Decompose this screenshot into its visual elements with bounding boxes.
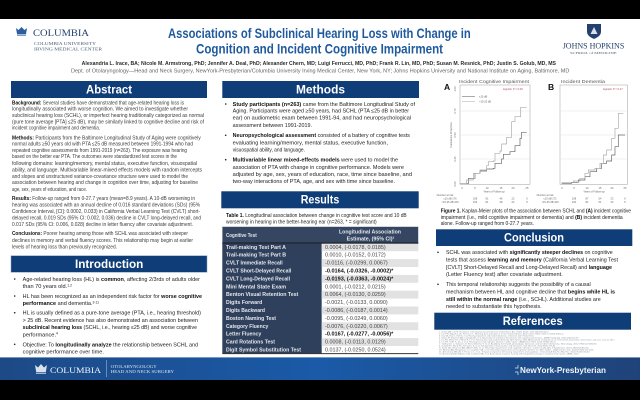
logo: NewYork-Presbyterian: NewYork-Presbyterian — [520, 366, 606, 375]
table: longitudinal association estimates: -0.0076, (-0.0220, 0.0067) — [325, 324, 388, 330]
reference list: 9. Deal JA, Sharrett AR, Albert MS, et al. Hearing impairment and cognitive decline: a pilot study. Am J Epidemiol. 2015;181(9):680-90. — [439, 347, 590, 350]
text: background: Background: Several studies have demonstrated that age-related hearing loss is — [12, 100, 184, 106]
table: longitudinal association estimates: Digit Symbol Substitution Test — [226, 348, 301, 354]
bullet: study participants — [225, 102, 416, 129]
chart A: incident cognitive impairment: 48 — [500, 200, 503, 204]
bullet: causal mechanism: This temporal relationship suggests the possibility of a causal — [446, 282, 591, 288]
chart A: incident cognitive impairment: >15-25 dB 100 — [441, 200, 459, 204]
bullet: definition — [14, 311, 201, 338]
logo: Columbia Otolaryngology Head and Neck Surgery: COLUMBIA — [50, 365, 102, 375]
chart B: incident dementia: logrank: P = 0.17 — [603, 87, 623, 91]
header banner — [16, 24, 625, 74]
bullet: steeper declines: [CVLT] Short-Delayed Recall and Long-Delayed Recall) and language — [446, 265, 612, 271]
panel: abstract — [11, 81, 207, 250]
chart B: incident dementia: >15-25 dB 100 — [541, 200, 559, 204]
text: methods summary: ability, and language. Multivariable linear-mixed effects models with random intercepts — [12, 168, 202, 174]
authors: Alexandria L. Irace, BA; Nicole M. Armstrong, PhD; Jennifer A. Deal, PhD; Alexander Chern, MD; Luigi Ferrucci, MD, PhD; Frank R. Lin, MD, PhD; Susan M. Resnick, PhD; Justin S. Golub, MD, MS — [82, 61, 557, 67]
chart B: incident dementia: 20 — [611, 186, 614, 190]
reference list: 12. Armstrong NM, Williams OA, Landman BA, et al. Association of poorer hearing with longitudinal change in cerebral white matter. JAMA. 2020. — [439, 353, 580, 356]
table: longitudinal association estimates: Cognitive Test — [226, 233, 257, 239]
chart B: incident dementia: 15 — [599, 186, 602, 190]
reference list: 10. Alattar AA, Bergstrom J, Laughlin GA, et al. Hearing impairment and cognitive decline in older adults. J Alzheimers Dis. 2020;73(4):1571-83. — [439, 349, 595, 352]
text: results summary: 0.017 SDs (95% CI: 0.006, 0.028) decline in letter fluency after covariate adjustment. — [12, 222, 193, 228]
chart A: incident cognitive impairment — [437, 79, 530, 204]
bullet: risk factor: HL has been recognized as an independent risk factor for worse cognitive — [23, 294, 202, 300]
panel: references — [434, 313, 631, 356]
chart A: incident cognitive impairment: 5 — [526, 197, 528, 201]
table: longitudinal association estimates: 0.0064, (-0.0130, 0.0259) — [325, 292, 386, 298]
table: longitudinal association estimates: -0.0095, (-0.0249, 0.0060) — [325, 316, 388, 322]
heading: methods — [222, 81, 419, 98]
bullet: steeper declines — [437, 250, 619, 278]
bullet: risk factor — [14, 294, 202, 307]
text: results summary: hearing was associated with an annual decline of 0.016 standard deviations (SDs) (95% — [12, 202, 200, 208]
bullet: definition: > 25 dB. Recent evidence has also demonstrated an association between — [23, 318, 198, 324]
text: background — [12, 100, 205, 132]
bullet: hearing loss common — [14, 277, 200, 290]
table: longitudinal association estimates: CVLT Immediate Recall — [226, 261, 283, 267]
chart A: incident cognitive impairment: 46 — [500, 197, 503, 201]
chart A: incident cognitive impairment: 15 — [500, 186, 503, 190]
bullet: statistical models: adjusted by age, sex, years of education, race, time since baseline, and — [233, 172, 412, 178]
table: longitudinal association estimates: Digits Forward — [226, 300, 262, 306]
chart B: incident dementia: 10 — [586, 186, 589, 190]
text: conclusions summary: levels of hearing loss than previously recognized. — [12, 244, 117, 250]
figure caption — [441, 208, 631, 227]
bullet: causal mechanism: still within the normal range (i.e., SCHL). Additional studies are — [446, 297, 601, 303]
chart B: incident dementia: 100 — [572, 200, 577, 204]
table: longitudinal association estimates: Digits Backward — [226, 308, 265, 314]
table: longitudinal association estimates: 0.0137, (-0.0250, 0.0524) — [325, 348, 386, 354]
text: results summary: Confidence Interval, [CI]: 0.0002, 0.033) in California Verbal Learning Test (CVLT) short- — [12, 209, 200, 215]
heading: results: Results — [301, 193, 340, 207]
chart B: incident dementia: 87 — [586, 197, 589, 201]
text: conclusions summary: Conclusions: Poorer hearing among those with SCHL was associated with steeper — [12, 231, 188, 237]
reference list: 6. Lin FR, Yaffe K, Xia J, et al. Hearing loss and cognitive decline in older adults. JAMA Intern Med. 2013;173(4):293-9. — [439, 341, 557, 344]
bullet: steeper declines: (Letter Fluency test) after covariate adjustment. — [446, 272, 563, 278]
text: methods summary: following domains: learning/memory, mental status, executive function, visuospatial — [12, 161, 197, 167]
table: longitudinal association estimates: Benton Visual Retention Test — [226, 292, 299, 298]
bullet: statistical models: two-way interactions of PTA, age, and sex with time since baseline. — [233, 179, 395, 185]
panel: methods — [222, 81, 419, 185]
chart A: incident cognitive impairment: ≤15 dB — [479, 95, 487, 99]
footer banner — [0, 357, 640, 380]
chart B: incident dementia: ≤15 dB 172 — [543, 197, 557, 201]
reference list: 8. Gurgel RK, Ward PD, Schwartz S, et al. Relationship of hearing loss and dementia. Otol Neurotol. 2014;35(5):775-81. — [439, 345, 557, 348]
panel: figure — [437, 79, 631, 227]
bullet: steeper declines: tests that assess learning and memory (California Verbal Learning Test — [446, 258, 619, 264]
chart A: incident cognitive impairment: logrank: P = 0.09 — [503, 87, 523, 91]
affiliations: Dept. of Otolaryngology—Head and Neck Surgery, NewYork-Presbyterian/Columbia University Irving Medical Center, New York, NY; Johns Hopkins University and National Institute on Aging, Baltimore, MD — [71, 68, 570, 74]
bullet: risk factor: 3-11 — [92, 300, 99, 304]
table: longitudinal association estimates: 0.0008, (-0.0113, 0.0129) — [325, 340, 386, 346]
table: longitudinal association estimates — [222, 227, 418, 354]
chart B: incident dementia: 23 — [611, 197, 614, 201]
text: background: (pure tone average [PTA] ≤25 dB), may be similarly linked to cognitive decline and risk of — [12, 120, 205, 126]
chart B: incident dementia: 0 — [561, 186, 563, 190]
chart B: incident dementia: 6 — [624, 197, 626, 201]
heading: introduction — [11, 256, 207, 272]
chart A: incident cognitive impairment: 22 — [512, 197, 515, 201]
bullet: causal mechanism: mechanism between HL and cognitive decline that begins while HL is — [446, 290, 615, 296]
reference list: 5. Lin FR, Metter EJ, O'Brien RJ, et al. Hearing loss and incident dementia. Arch Neurol. 2011;68(2):214-20. Livingston G, et al. Dementia prevention, intervention, and care. Lancet. 2017. — [439, 339, 616, 342]
table: longitudinal association estimates: -0.0167, (-0.0277, -0.0056)* — [325, 332, 394, 338]
text: methods summary: based on the better ear PTA. The outcomes were standardized test scores in the — [12, 154, 177, 160]
text: methods summary: age, sex, years of education, and race. — [12, 187, 87, 193]
chart B: incident dementia: 25 — [624, 186, 627, 190]
logo: Columbia University Irving Medical Center: COLUMBIA — [33, 28, 90, 38]
bullet: definition: performance. — [23, 332, 53, 338]
bullet: statistical models: Multivariable linear mixed-effects models were used to model the — [233, 158, 398, 164]
heading: methods: Methods — [296, 82, 345, 96]
table: longitudinal association estimates: Category Fluency — [226, 324, 268, 330]
bullet: objective: Objective: To longitudinally analyze the relationship between SCHL and — [23, 342, 198, 348]
text: methods summary: repeated cognitive assessments from 1991-2019 (n=263). The exposure was hearing — [12, 148, 187, 154]
text: methods summary: Methods: Participants from the Baltimore Longitudinal Study of Aging were cognitively — [12, 136, 201, 142]
chart B: incident dementia: 108 — [572, 197, 577, 201]
bullet: study participants: assessment between 1991-2019. — [233, 123, 312, 129]
text: background: incident cognitive impairment and dementia. — [12, 126, 100, 132]
logo: Columbia Otolaryngology Head and Neck Surgery: HEAD AND NECK SURGERY — [111, 370, 174, 374]
figure caption: Figure 1. Kaplan-Meier plots of the association between SCHL and (A) incident cognitive — [441, 208, 631, 214]
chart B: incident dementia: 54 — [599, 197, 602, 201]
chart A: incident cognitive impairment: 0.75 — [453, 108, 457, 114]
logo: Columbia University Irving Medical Center — [16, 27, 103, 52]
table: longitudinal association estimates: Trail-making Test Part A — [226, 245, 286, 251]
table: longitudinal association estimates: 0.0004, (-0.0178, 0.0185) — [325, 245, 386, 251]
bullet: risk factor: performance and dementia. — [23, 301, 90, 307]
table: longitudinal association estimates: Card Rotations Test — [226, 340, 275, 346]
logo: Johns Hopkins School of Medicine — [563, 24, 625, 55]
chart A: incident cognitive impairment: 0.25 — [453, 156, 457, 162]
bullet: definition: subclinical hearing loss (SCHL, i.e., hearing ≤25 dB) and worse cognitive — [23, 325, 197, 331]
bullet: study participants: Aging. Participants were aged ≥50 years, had SCHL (PTA ≤25 dB in better — [233, 108, 409, 114]
reference list — [439, 330, 616, 356]
table: longitudinal association estimates: Estimate, (95% CI)² — [347, 236, 395, 242]
table: longitudinal association estimates: Longitudinal Association — [339, 230, 401, 236]
heading: references: References — [503, 314, 563, 328]
text: background: longitudinally associated with worse cognition. We aimed to investigate whether — [12, 106, 188, 112]
chart A: incident cognitive impairment: 5 — [474, 186, 476, 190]
heading: results — [221, 191, 419, 208]
panel: conclusion — [436, 229, 632, 310]
reference list: 3. Deal JA, Betz J, Yaffe K, et al. Hearing impairment and incident dementia. J Gerontol. 2017;72(5):703-9. — [439, 335, 534, 338]
text: conclusions summary: declines in memory and verbal fluency scores. This relationship may begin at earlier — [12, 238, 193, 244]
figure caption: alone. Follow-up ranged from 0-27.7 years. — [441, 221, 534, 227]
chart A: incident cognitive impairment: 0.50 — [453, 132, 457, 138]
chart A: incident cognitive impairment: A — [444, 82, 450, 92]
bullet: statistical models — [225, 158, 412, 185]
text: background: subclinical hearing loss (SCHL), or imperfect hearing traditionally categorized as normal — [12, 113, 204, 119]
reference list: 1. Goman AM, Lin FR. Prevalence of hearing loss by severity in the United States. Am J Public Health. 2016;106(10):1820-2. — [439, 330, 549, 334]
chart A: incident cognitive impairment: Cumulative Proportion — [449, 122, 453, 148]
bullet: causal mechanism: needed to substantiate this hypothesis. — [446, 304, 542, 310]
logo: Columbia Otolaryngology Head and Neck Surgery — [35, 360, 174, 377]
logo: Johns Hopkins School of Medicine: SCHOOL of MEDICINE — [570, 51, 617, 55]
bullet: study participants: Study participants (n=263) came from the Baltimore Longitudinal Study of — [233, 102, 416, 108]
chart B: incident dementia: B — [548, 82, 554, 92]
bullet: neuropsychological assessment: visuospatial ability, and language. — [233, 148, 305, 154]
reference list: 4. Golub JS, Brickman AM, Ciarleglio AJ, et al. Association of subclinical hearing loss with cognitive performance. JAMA Otolaryngol. 2020;146(1):57-67. — [439, 337, 580, 340]
chart B: incident dementia: 81 — [586, 200, 589, 204]
heading: abstract — [11, 81, 207, 98]
bullet: objective: cognitive performance over time. — [23, 350, 104, 356]
bullet: definition: 4 — [56, 332, 58, 336]
panel: results — [221, 191, 419, 354]
text: methods summary — [12, 136, 202, 193]
logo: Columbia Otolaryngology Head and Neck Surgery: OTOLARYNGOLOGY — [111, 365, 157, 369]
reference list: 2. Lin FR, Niparko JK, Ferrucci L. Hearing loss prevalence in the United States. Arch Intern Med. 2011;171(20):1851-2. — [439, 332, 565, 336]
chart A: incident cognitive impairment: >15-25 dB — [479, 100, 491, 104]
title: Associations of Subclinical Hearing Loss with Change in — [168, 25, 471, 41]
table: longitudinal association estimates: Boston Naming Test — [226, 316, 276, 322]
chart A: incident cognitive impairment: 108 — [473, 197, 478, 201]
table: longitudinal association estimates: CVLT Short-Delayed Recall — [226, 268, 292, 274]
bullet: neuropsychological assessment — [225, 133, 410, 154]
bullet: hearing loss common: than 70 years old. — [23, 284, 64, 290]
chart B: incident dementia: Incident Dementia — [561, 79, 606, 84]
bullet: neuropsychological assessment: evaluating learning/memory, mental status, executive function, — [233, 140, 388, 146]
chart A: incident cognitive impairment: 91 — [486, 197, 489, 201]
table: longitudinal association estimates: -0.0164, (-0.0326, -0.0002)* — [325, 268, 394, 274]
chart A: incident cognitive impairment: Incident Cognitive Impairment — [459, 79, 530, 84]
bullet: objective — [14, 342, 198, 356]
table: longitudinal association estimates: 0.0010, (-0.0152, 0.0172) — [325, 253, 386, 259]
heading: introduction: Introduction — [75, 257, 143, 271]
bullet: causal mechanism — [437, 282, 615, 310]
chart B: incident dementia: 51 — [599, 200, 602, 204]
title — [168, 25, 471, 57]
figure caption: impairment (i.e., mild cognitive impairment or dementia) and (B) incident dementia — [441, 215, 623, 221]
bullet: definition: HL is usually defined as a pure-tone average (PTA, i.e., hearing threshold) — [23, 311, 201, 317]
bullet: hearing loss common: 1,2 — [67, 283, 72, 287]
chart A: incident cognitive impairment: 20 — [512, 186, 515, 190]
table: longitudinal association estimates: -0.0193, (-0.0363, -0.0024)* — [325, 276, 394, 282]
chart A: incident cognitive impairment: 0 — [461, 186, 463, 190]
bullet: steeper declines: SCHL was associated with significantly steeper declines on cognitive — [446, 250, 613, 256]
bullet: hearing loss common: Age-related hearing loss (HL) is common, affecting 2/3rds of adults older — [23, 277, 200, 283]
heading: conclusion: Conclusion — [504, 231, 564, 245]
chart A: incident cognitive impairment: ≤15 dB 176 — [443, 197, 457, 201]
table caption: worsening in hearing in the better-hearing ear (n=263, * = significant) — [226, 220, 377, 226]
chart A: incident cognitive impairment: Number at risk — [437, 193, 454, 197]
bullet: study participants: ear) on audiometric exam between 1991-94, and had neuropsychological — [233, 116, 411, 122]
heading: abstract: Abstract — [86, 82, 132, 96]
table: longitudinal association estimates: -0.0086, (-0.0187, 0.0014) — [325, 308, 388, 314]
chart B: incident dementia: 5 — [573, 186, 575, 190]
text: results summary: Results: Follow-up ranged from 0-27.7 years (mean=8.9 years). A 10-dB worsening in — [12, 196, 195, 202]
text: results summary: delayed recall, 0.019 SDs (95% CI: 0.002, 0.036) decline in CVLT long-delayed recall, and — [12, 216, 201, 222]
table: longitudinal association estimates: Mini Mental State Exam — [226, 284, 286, 290]
bullet: statistical models: association of PTA with change in cognitive performance. Models were — [233, 165, 404, 171]
chart A: incident cognitive impairment: 1.00 — [453, 86, 457, 92]
title: Cognition and Incident Cognitive Impairment — [196, 41, 443, 57]
chart A: incident cognitive impairment: Years of Follow-up — [483, 190, 505, 194]
table: longitudinal association estimates: CVLT Long-Delayed Recall — [226, 276, 291, 282]
logo: Johns Hopkins School of Medicine: JOHNS HOPKINS — [563, 41, 625, 50]
chart B: incident dementia: Number at risk — [537, 193, 554, 197]
chart A: incident cognitive impairment: 5 — [526, 200, 528, 204]
table: longitudinal association estimates: Trail-making Test Part B — [226, 253, 286, 259]
chart A: incident cognitive impairment: 22 — [512, 200, 515, 204]
chart A: incident cognitive impairment: 106 — [473, 200, 478, 204]
table: longitudinal association estimates: Letter Fluency — [226, 332, 261, 338]
bullet: neuropsychological assessment: Neuropsychological assessment consisted of a battery of cognitive tests — [233, 133, 410, 139]
reference list: 11. Armstrong NM, An Y, Ferrucci L, et al. Temporal sequence of hearing impairment and cognition. J Gerontol A Biol Sci Med Sci. 2020;75(3):574-80. — [439, 351, 591, 354]
chart B: incident dementia: 23 — [611, 200, 614, 204]
table: longitudinal association estimates: -0.0021, (-0.0133, 0.0090) — [325, 300, 388, 306]
text: conclusions summary — [12, 231, 193, 250]
reference list: 7. Gallacher J, Ilubaera V, Ben-Shlomo Y, et al. Auditory threshold, phonologic demand, and incident dementia. Neurology. 2012;79(15):1583-90. — [439, 343, 598, 346]
heading: references — [434, 313, 631, 330]
text: methods summary: association between hearing and change in cognition over time, adjusting for baseline — [12, 180, 198, 186]
chart A: incident cognitive impairment: 10 — [486, 186, 489, 190]
logo: Columbia University Irving Medical Center: IRVING MEDICAL CENTER — [34, 48, 103, 52]
chart A: incident cognitive impairment: 0.00 — [453, 181, 457, 187]
table caption — [226, 213, 407, 226]
table caption: Table 1. Longitudinal association between change in cognitive test score and 10 dB — [226, 213, 407, 219]
table: longitudinal association estimates: -0.0116, (-0.0299, 0.0067) — [325, 261, 388, 267]
chart B: incident dementia — [537, 79, 628, 204]
chart B: incident dementia: Years of Follow-up — [583, 190, 605, 194]
logo: Columbia University Irving Medical Center: COLUMBIA UNIVERSITY — [34, 42, 97, 46]
chart B: incident dementia: 5 — [624, 200, 626, 204]
text: methods summary: and slopes and unstructured variance-covariance structure were used to model the — [12, 174, 188, 180]
panel: introduction — [11, 256, 207, 356]
heading: conclusion — [436, 229, 632, 246]
chart A: incident cognitive impairment: 81 — [486, 200, 489, 204]
text: methods summary: normal adults ≥50 years old with PTA ≤25 dB measured between 1991-1994 who had — [12, 142, 193, 148]
text: results summary — [12, 196, 201, 228]
chart A: incident cognitive impairment: 25 — [526, 186, 529, 190]
table: longitudinal association estimates: 0.0001, (-0.0212, 0.0215) — [325, 284, 386, 290]
